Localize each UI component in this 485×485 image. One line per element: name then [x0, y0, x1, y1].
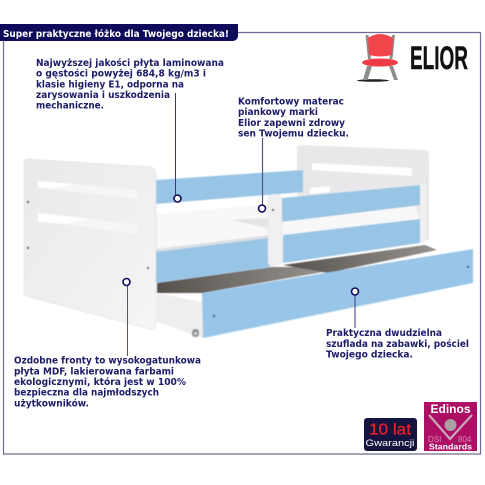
text: board quality: klasie higieny E1, odporna na — [36, 80, 184, 90]
text: fronts: bezpieczna dla najmłodszych — [14, 388, 159, 398]
text: drawer: szuflada na zabawki, pościel — [326, 338, 469, 350]
front side panel blue — [283, 219, 420, 263]
text: mattress: piankowy marki — [238, 107, 318, 118]
header banner: Super praktyczne łóżko dla Twojego dziecka! — [3, 28, 229, 40]
text: drawer — [326, 328, 469, 360]
badge: Edinos standards: DSI — [428, 435, 441, 444]
mattress — [156, 204, 268, 252]
pointer: mattress — [258, 138, 266, 212]
right guard post — [420, 182, 426, 243]
pointer: board quality — [174, 93, 181, 202]
badge: Edinos standards: Standards — [429, 442, 473, 452]
left headboard — [24, 159, 156, 329]
header banner — [0, 24, 238, 41]
text: fronts: płyta MDF, lakierowana farbami — [14, 366, 174, 378]
side panel blue — [156, 238, 270, 283]
pointer: drawer — [352, 288, 358, 328]
text: mattress: Elior zapewni zdrowy — [238, 118, 346, 129]
right headboard — [297, 145, 429, 250]
text: drawer: Twojego dziecka. — [326, 350, 413, 360]
pointer: fronts — [123, 278, 130, 356]
text: fronts: użytkowników. — [14, 398, 89, 410]
bed illustration — [24, 145, 473, 338]
front mattress strip — [282, 206, 420, 235]
text: mattress: Komfortowy materac — [238, 96, 344, 108]
text: board quality: Najwyższej jakości płyta laminowana — [36, 57, 224, 69]
text: board quality: zarysowania i uszkodzenia — [36, 90, 170, 101]
text: mattress: sen Twojemu dziecku. — [238, 128, 349, 140]
text: fronts: Ozdobne fronty to wysokogatunkowa — [14, 356, 201, 366]
text: mattress — [238, 96, 349, 140]
text: fronts — [14, 356, 201, 410]
text: fronts: ekologicznymi, która jest w 100% — [14, 376, 186, 388]
badge: Edinos standards: 804 — [458, 435, 472, 444]
text: drawer: Praktyczna dwudzielna — [326, 328, 442, 339]
badge: 10 year warranty: Gwarancji — [366, 438, 414, 449]
drawer wheel — [192, 329, 199, 337]
front guard rail upper — [282, 185, 420, 222]
icon: red chair — [357, 34, 398, 82]
guard post — [268, 194, 282, 266]
back blue rail — [156, 170, 303, 204]
badge: Edinos standards: Edinos — [430, 402, 471, 416]
badge: 10 year warranty: 10 lat — [369, 422, 412, 438]
drawer front — [202, 249, 473, 338]
drawer side — [157, 293, 203, 338]
text: board quality: o gęstości powyżej 684,8 kg/m3 i — [36, 68, 206, 80]
text: board quality — [36, 57, 224, 112]
badge: 10 year warranty — [364, 418, 417, 451]
drawer interior — [157, 245, 437, 293]
badge: Edinos standards — [424, 402, 477, 452]
text: board quality: mechaniczne. — [36, 100, 104, 112]
